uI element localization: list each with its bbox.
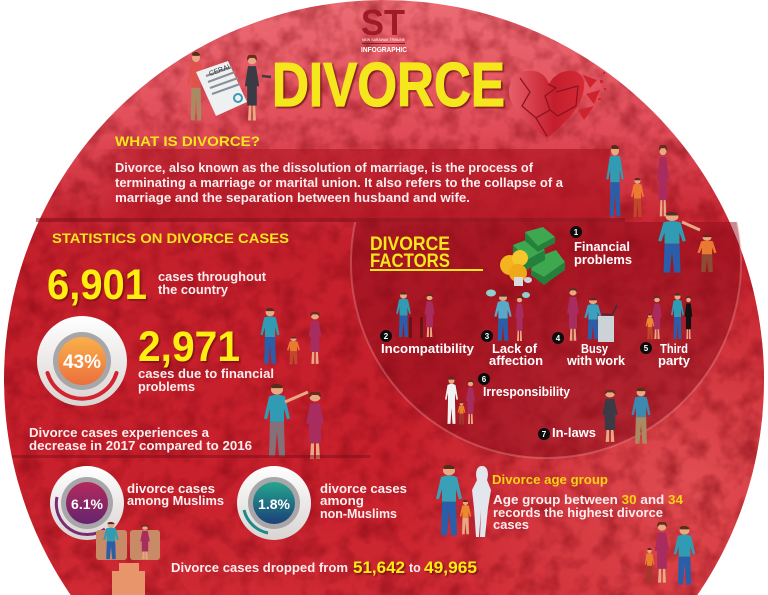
icon: family with white silhouette [436,465,491,537]
icon: couple in counselling chairs [96,522,160,595]
factor 3: lack of affection [481,290,543,368]
logo: ST infographic: INFOGRAPHIC [361,47,407,54]
icon: family separating [606,145,669,217]
dark band under panel [36,218,625,222]
factor 5: third party: Third [660,341,688,356]
heading: statistics: STATISTICS ON DIVORCE CASES [52,230,289,246]
text: cases among non-Muslims: non-Muslims [320,507,397,521]
factor 7: in-laws: In-laws [552,425,596,440]
factor 6: irresponsibility [445,373,571,424]
heading: divorce factors [370,234,483,272]
text: cases among non-Muslims: among [320,494,364,508]
factor 1: financial problems: Financial [574,239,630,254]
panel: what is divorce: terminating a marriage or marital union. It also refers to the collapse of a [115,176,564,190]
icon: broken heart [509,71,606,138]
text: cases among Muslims: among Muslims [127,494,224,508]
donut: 1.8% non-Muslims [237,466,311,540]
factor 4: busy with work: Busy [581,341,609,356]
factor 2: incompatibility [380,292,475,356]
factor 1: financial problems: problems [574,252,632,267]
text: decrease in 2017 [29,426,252,453]
heading: divorce factors: DIVORCE [370,234,450,255]
icon: family with drinking father [645,522,695,585]
text: divorce age group: Age group between 30 and 34 [493,493,683,507]
text: cases among Muslims: divorce cases [127,482,215,496]
factor 1: financial problems: 1 [574,228,579,237]
factor 4: busy with work [552,288,626,368]
factor 7: in-laws: 7 [542,430,547,439]
donut: 1.8% non-Muslims: 1.8% [258,496,291,512]
donut: 43%: 43% [63,352,101,373]
heading: divorce factors: FACTORS [370,251,450,272]
icon: couple with divorce certificate [187,52,271,121]
title: DIVORCE [272,51,505,120]
panel: what is divorce: marriage and the separation between husband and wife. [115,191,470,205]
text: cases dropped: 49,965 [424,558,477,577]
factor 4: busy with work: with work [566,353,626,368]
donut: 6.1% Muslims: 6.1% [71,496,104,512]
icon: father and child [658,212,717,273]
stat: 2,971 cases: 2,971 [138,323,240,371]
stat: 6,901 cases [47,261,267,309]
icon: couple with divorce certificate: CERAI [208,64,231,78]
icon: family walking [260,308,322,364]
text: cases dropped [171,558,477,577]
text: cases dropped: 51,642 [353,558,405,577]
text: divorce age group: Divorce age group [492,472,608,487]
panel: what is divorce [95,149,610,218]
dark band under statistics [12,455,370,458]
stat: 6,901 cases: cases throughout [158,270,267,284]
icon: arguing couple [264,384,324,458]
factor 7: in-laws [538,388,651,444]
text: decrease in 2017: Divorce cases experiences a [29,426,210,440]
icon: money [500,227,565,286]
logo: ST infographic: NEW SARAWAK TRIBUNE [362,38,406,42]
text: divorce age group [492,472,683,532]
factor 2: incompatibility: Incompatibility [381,341,475,356]
factor 5: third party: party [658,353,691,368]
factor 5: third party: 5 [644,344,649,353]
text: divorce age group: records the highest divorce [493,506,663,520]
text: cases among Muslims [127,482,224,508]
panel: what is divorce: Divorce, also known as the dissolution of marriage, is the process of [115,161,534,175]
stat: 6,901 cases: the country [158,283,228,297]
text: divorce age group: cases [493,518,529,532]
stat: 2,971 cases [138,323,274,394]
factor 1: financial problems [570,226,632,267]
logo: ST infographic: ST [361,2,405,43]
factor 3: lack of affection: Lack of [492,341,538,356]
donut: 6.1% Muslims [50,466,124,540]
text: cases among non-Muslims [320,482,407,521]
stat: 6,901 cases: 6,901 [47,261,147,309]
factor 4: busy with work: 4 [556,334,561,343]
panel: divorce factors circle [350,222,742,459]
text: cases dropped: to [409,561,421,575]
factor 5: third party [640,293,692,368]
factor 2: incompatibility: 2 [384,332,389,341]
heading: what is divorce: WHAT IS DIVORCE? [115,133,260,149]
factor 6: irresponsibility: Irresponsibility [483,384,571,399]
donut: 43% [37,316,127,406]
text: cases among non-Muslims: divorce cases [320,482,407,496]
text: cases dropped: Divorce cases dropped from [171,561,348,575]
factor 3: lack of affection: 3 [485,332,490,341]
factor 6: irresponsibility: 6 [482,375,487,384]
stat: 2,971 cases: problems [138,380,195,394]
stat: 2,971 cases: cases due to financial [138,367,274,381]
factor 3: lack of affection: affection [489,353,543,368]
text: decrease in 2017: decrease in 2017 compared to 2016 [29,439,252,453]
